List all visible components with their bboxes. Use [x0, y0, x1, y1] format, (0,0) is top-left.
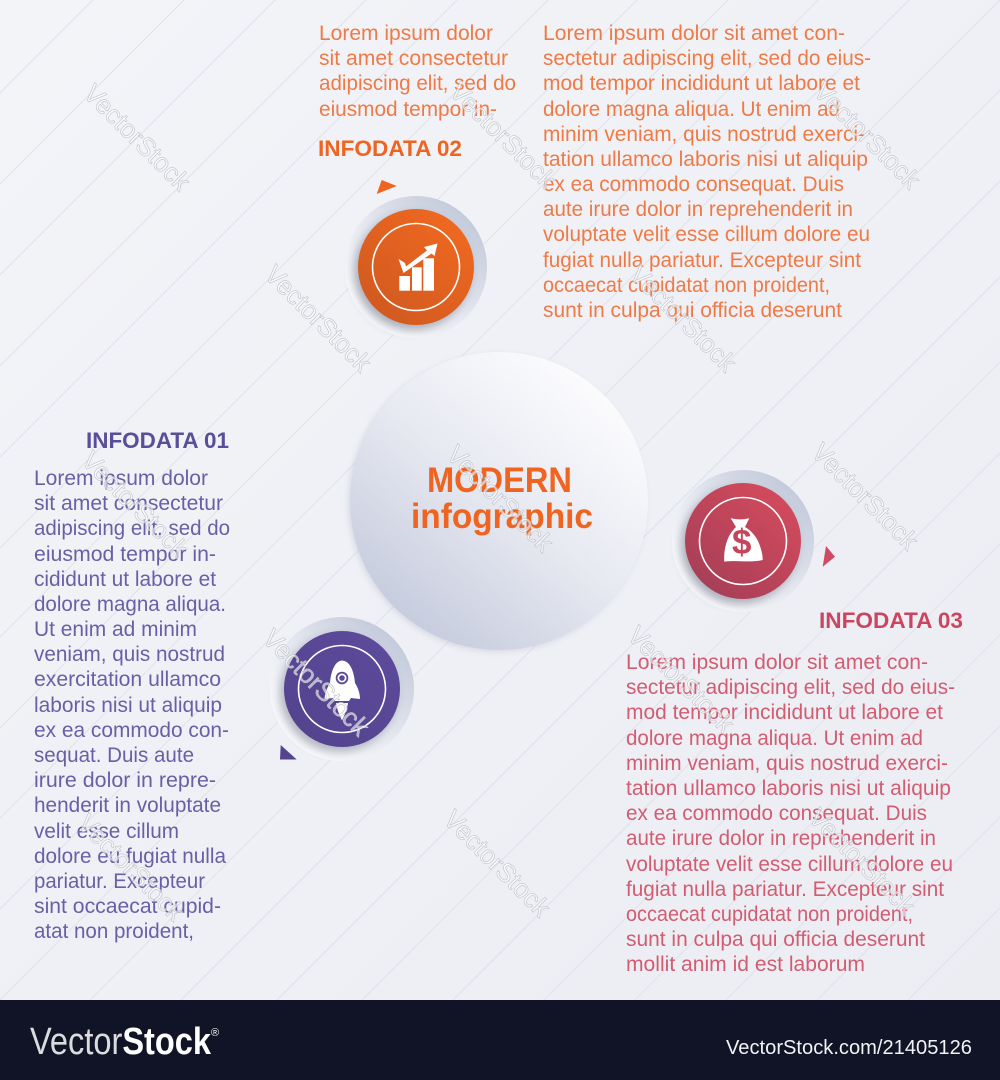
text block: infodata 02 wide column: aute irure dolor in reprehenderit in — [543, 198, 853, 221]
text block: infodata 02 wide column: ex ea commodo consequat. Duis — [543, 173, 844, 196]
node: infodata 02 orange — [345, 196, 487, 338]
watermarks: VectorStock — [438, 804, 557, 924]
footer registered mark: ® — [211, 1027, 219, 1039]
watermarks: VectorStock — [622, 620, 741, 740]
text block: infodata 01: cididunt ut labore et — [34, 568, 216, 591]
watermarks: VectorStock — [444, 76, 563, 196]
text block: infodata 03: mollit anim id est laborum — [626, 953, 865, 976]
text block: infodata 01 — [34, 467, 230, 943]
text block: infodata 02 wide column: minim veniam, quis nostrud exerci- — [543, 123, 865, 146]
title: MODERN — [427, 461, 572, 500]
text block: infodata 01: velit esse cillum — [34, 820, 179, 843]
text block: infodata 03: aute irure dolor in reprehenderit in — [626, 827, 936, 850]
watermarks: VectorStock — [806, 437, 925, 557]
text block: infodata 02 wide column: sectetur adipiscing elit, sed do eius- — [543, 47, 871, 70]
text block: infodata 02 wide column: tation ullamco laboris nisi ut aliquip — [543, 148, 868, 171]
text block: infodata 01: sit amet consectetur — [34, 492, 223, 515]
text block: infodata 01: exercitation ullamco — [34, 668, 221, 691]
text block: infodata 01: veniam, quis nostrud — [34, 643, 225, 666]
watermarks: VectorStock — [78, 78, 197, 198]
text block: infodata 03 — [626, 651, 955, 976]
watermarks: VectorStock — [808, 76, 927, 196]
watermarks: VectorStock — [624, 259, 743, 379]
text block: infodata 03: sectetur adipiscing elit, sed do eius- — [626, 676, 955, 699]
node: infodata 01 purple — [270, 617, 414, 761]
watermarks: VectorStock — [257, 623, 376, 743]
footer bar — [0, 1000, 1000, 1080]
text block: infodata 01: Lorem ipsum dolor — [34, 467, 208, 490]
title — [411, 461, 593, 536]
text block: infodata 01: atat non proident, — [34, 920, 194, 943]
watermarks: VectorStock — [803, 802, 922, 922]
arrow: orange — [377, 180, 397, 194]
text block: infodata 02 wide column: fugiat nulla pariatur. Excepteur sint — [543, 249, 861, 272]
text block: infodata 02 wide column: mod tempor incididunt ut labore et — [543, 72, 860, 95]
text block: infodata 02 narrow column: Lorem ipsum dolor — [319, 22, 493, 45]
text block: infodata 03: sunt in culpa qui officia deserunt — [626, 928, 925, 951]
title: infographic — [411, 497, 593, 536]
text block: infodata 03: occaecat cupidatat non proident, — [626, 903, 913, 926]
heading: infodata 03: INFODATA 03 — [819, 608, 963, 633]
text block: infodata 03: ex ea commodo consequat. Duis — [626, 802, 927, 825]
text block: infodata 03: tation ullamco laboris nisi ut aliquip — [626, 777, 951, 800]
text block: infodata 02 wide column: Lorem ipsum dolor sit amet con- — [543, 22, 845, 45]
text block: infodata 01: dolore magna aliqua. — [34, 593, 226, 616]
text block: infodata 02 wide column: sunt in culpa qui officia deserunt — [543, 299, 842, 322]
text block: infodata 02 narrow column — [319, 22, 516, 121]
node: infodata 03 red — [672, 470, 814, 612]
text block: infodata 01: laboris nisi ut aliquip — [34, 694, 222, 717]
arrow: purple — [280, 745, 297, 760]
text block: infodata 01: dolore eu fugiat nulla — [34, 845, 226, 868]
text block: infodata 01: sint occaecat cupid- — [34, 895, 221, 918]
text block: infodata 02 narrow column: sit amet consectetur — [319, 47, 508, 70]
icon: rocket — [324, 660, 360, 720]
heading: infodata 01: INFODATA 01 — [86, 428, 229, 453]
watermarks: VectorStock — [72, 808, 191, 928]
text block: infodata 01: sequat. Duis aute — [34, 744, 194, 767]
text block: infodata 03: Lorem ipsum dolor sit amet con- — [626, 651, 928, 674]
text block: infodata 03: fugiat nulla pariatur. Excepteur sint — [626, 878, 944, 901]
text block: infodata 01: pariatur. Excepteur — [34, 870, 205, 893]
text block: infodata 03: mod tempor incididunt ut labore et — [626, 701, 943, 724]
watermarks: VectorStock — [76, 445, 195, 565]
text block: infodata 01: adipiscing elit, sed do — [34, 517, 230, 540]
footer logo: VectorStock — [30, 1021, 212, 1063]
watermarks: VectorStock — [259, 259, 378, 379]
text block: infodata 02 narrow column: adipiscing elit, sed do — [319, 72, 516, 95]
text block: infodata 02 narrow column: eiusmod tempor in- — [319, 98, 497, 121]
heading: infodata 02: INFODATA 02 — [318, 136, 462, 161]
text block: infodata 01: ex ea commodo con- — [34, 719, 229, 742]
watermarks: VectorStock — [441, 439, 560, 559]
icon: money bag: $ — [732, 523, 751, 562]
text block: infodata 03: voluptate velit esse cillum dolore eu — [626, 853, 953, 876]
watermarks — [72, 76, 927, 928]
text block: infodata 01: irure dolor in repre- — [34, 769, 216, 792]
text block: infodata 03: dolore magna aliqua. Ut enim ad — [626, 727, 923, 750]
icon: money bag — [724, 518, 763, 562]
text block: infodata 01: henderit in voluptate — [34, 794, 221, 817]
text block: infodata 01: Ut enim ad minim — [34, 618, 197, 641]
text block: infodata 03: minim veniam, quis nostrud exerci- — [626, 752, 948, 775]
text block: infodata 01: eiusmod tempor in- — [34, 543, 216, 566]
text block: infodata 02 wide column — [543, 22, 871, 322]
text block: infodata 02 wide column: voluptate velit esse cillum dolore eu — [543, 223, 870, 246]
text block: infodata 02 wide column: dolore magna aliqua. Ut enim ad — [543, 98, 840, 121]
central circle — [348, 352, 648, 652]
icon: growth chart — [398, 244, 438, 291]
text block: infodata 02 wide column: occaecat cupidatat non proident, — [543, 274, 830, 297]
footer url: VectorStock.com/21405126 — [726, 1037, 972, 1059]
arrow: red — [823, 546, 835, 567]
